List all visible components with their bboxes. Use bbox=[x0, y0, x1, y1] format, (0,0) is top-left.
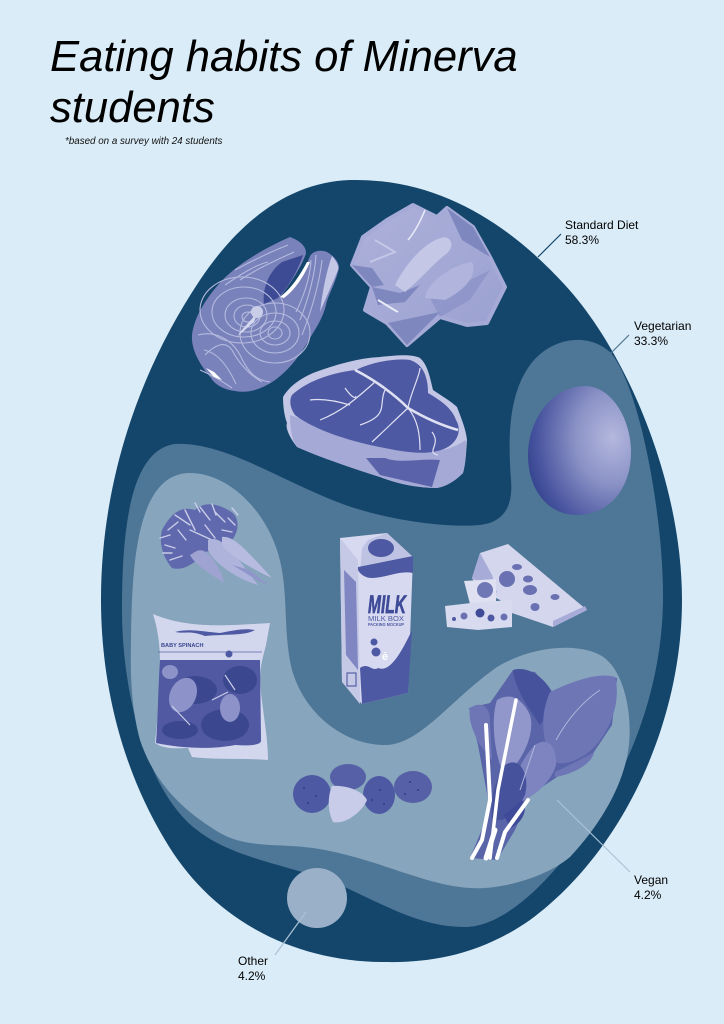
icon: milk carton bbox=[340, 533, 413, 704]
label: vegan: 4.2% bbox=[634, 888, 662, 902]
label: vegan: Vegan bbox=[634, 873, 668, 887]
icon: chicken pieces bbox=[352, 205, 505, 345]
panel: standard diet region bbox=[101, 180, 682, 962]
icon: egg bbox=[528, 386, 631, 515]
label: other: 4.2% bbox=[238, 969, 266, 983]
label: other: Other bbox=[238, 954, 268, 968]
panel: other circle bbox=[287, 868, 347, 928]
label: standard diet: Standard Diet bbox=[565, 218, 639, 232]
title: students bbox=[50, 84, 215, 132]
leader line: other bbox=[275, 912, 306, 955]
icon: strawberries bbox=[293, 764, 432, 822]
icon: swiss cheese bbox=[445, 544, 587, 630]
cap bbox=[368, 539, 394, 557]
icon: salmon steak bbox=[192, 237, 339, 392]
label: standard diet: 58.3% bbox=[565, 233, 599, 247]
label: vegetarian: Vegetarian bbox=[634, 319, 691, 333]
title: Eating habits of Minerva bbox=[50, 33, 518, 81]
icon: milk carton: MILK BOX bbox=[368, 614, 404, 623]
survey note: *based on a survey with 24 students bbox=[65, 136, 222, 147]
spinach bag label: BABY SPINACH bbox=[161, 643, 203, 649]
icon: milk carton: ė bbox=[382, 651, 388, 663]
panel: vegan region bbox=[131, 473, 630, 888]
icon: baby spinach bag bbox=[153, 614, 270, 760]
label: vegetarian: 33.3% bbox=[634, 334, 668, 348]
icon: beef steak bbox=[283, 355, 467, 488]
panel: vegetarian region bbox=[122, 340, 663, 927]
leader line: standard diet bbox=[538, 234, 561, 257]
icon: leafy greens bbox=[469, 669, 617, 860]
milk wordmark: MILK bbox=[368, 591, 407, 619]
icon: carrots bbox=[160, 503, 272, 585]
icon: milk carton: PACKING MOCKUP bbox=[368, 622, 404, 627]
leader line: vegan bbox=[557, 800, 630, 872]
leader line: vegetarian bbox=[601, 335, 629, 363]
